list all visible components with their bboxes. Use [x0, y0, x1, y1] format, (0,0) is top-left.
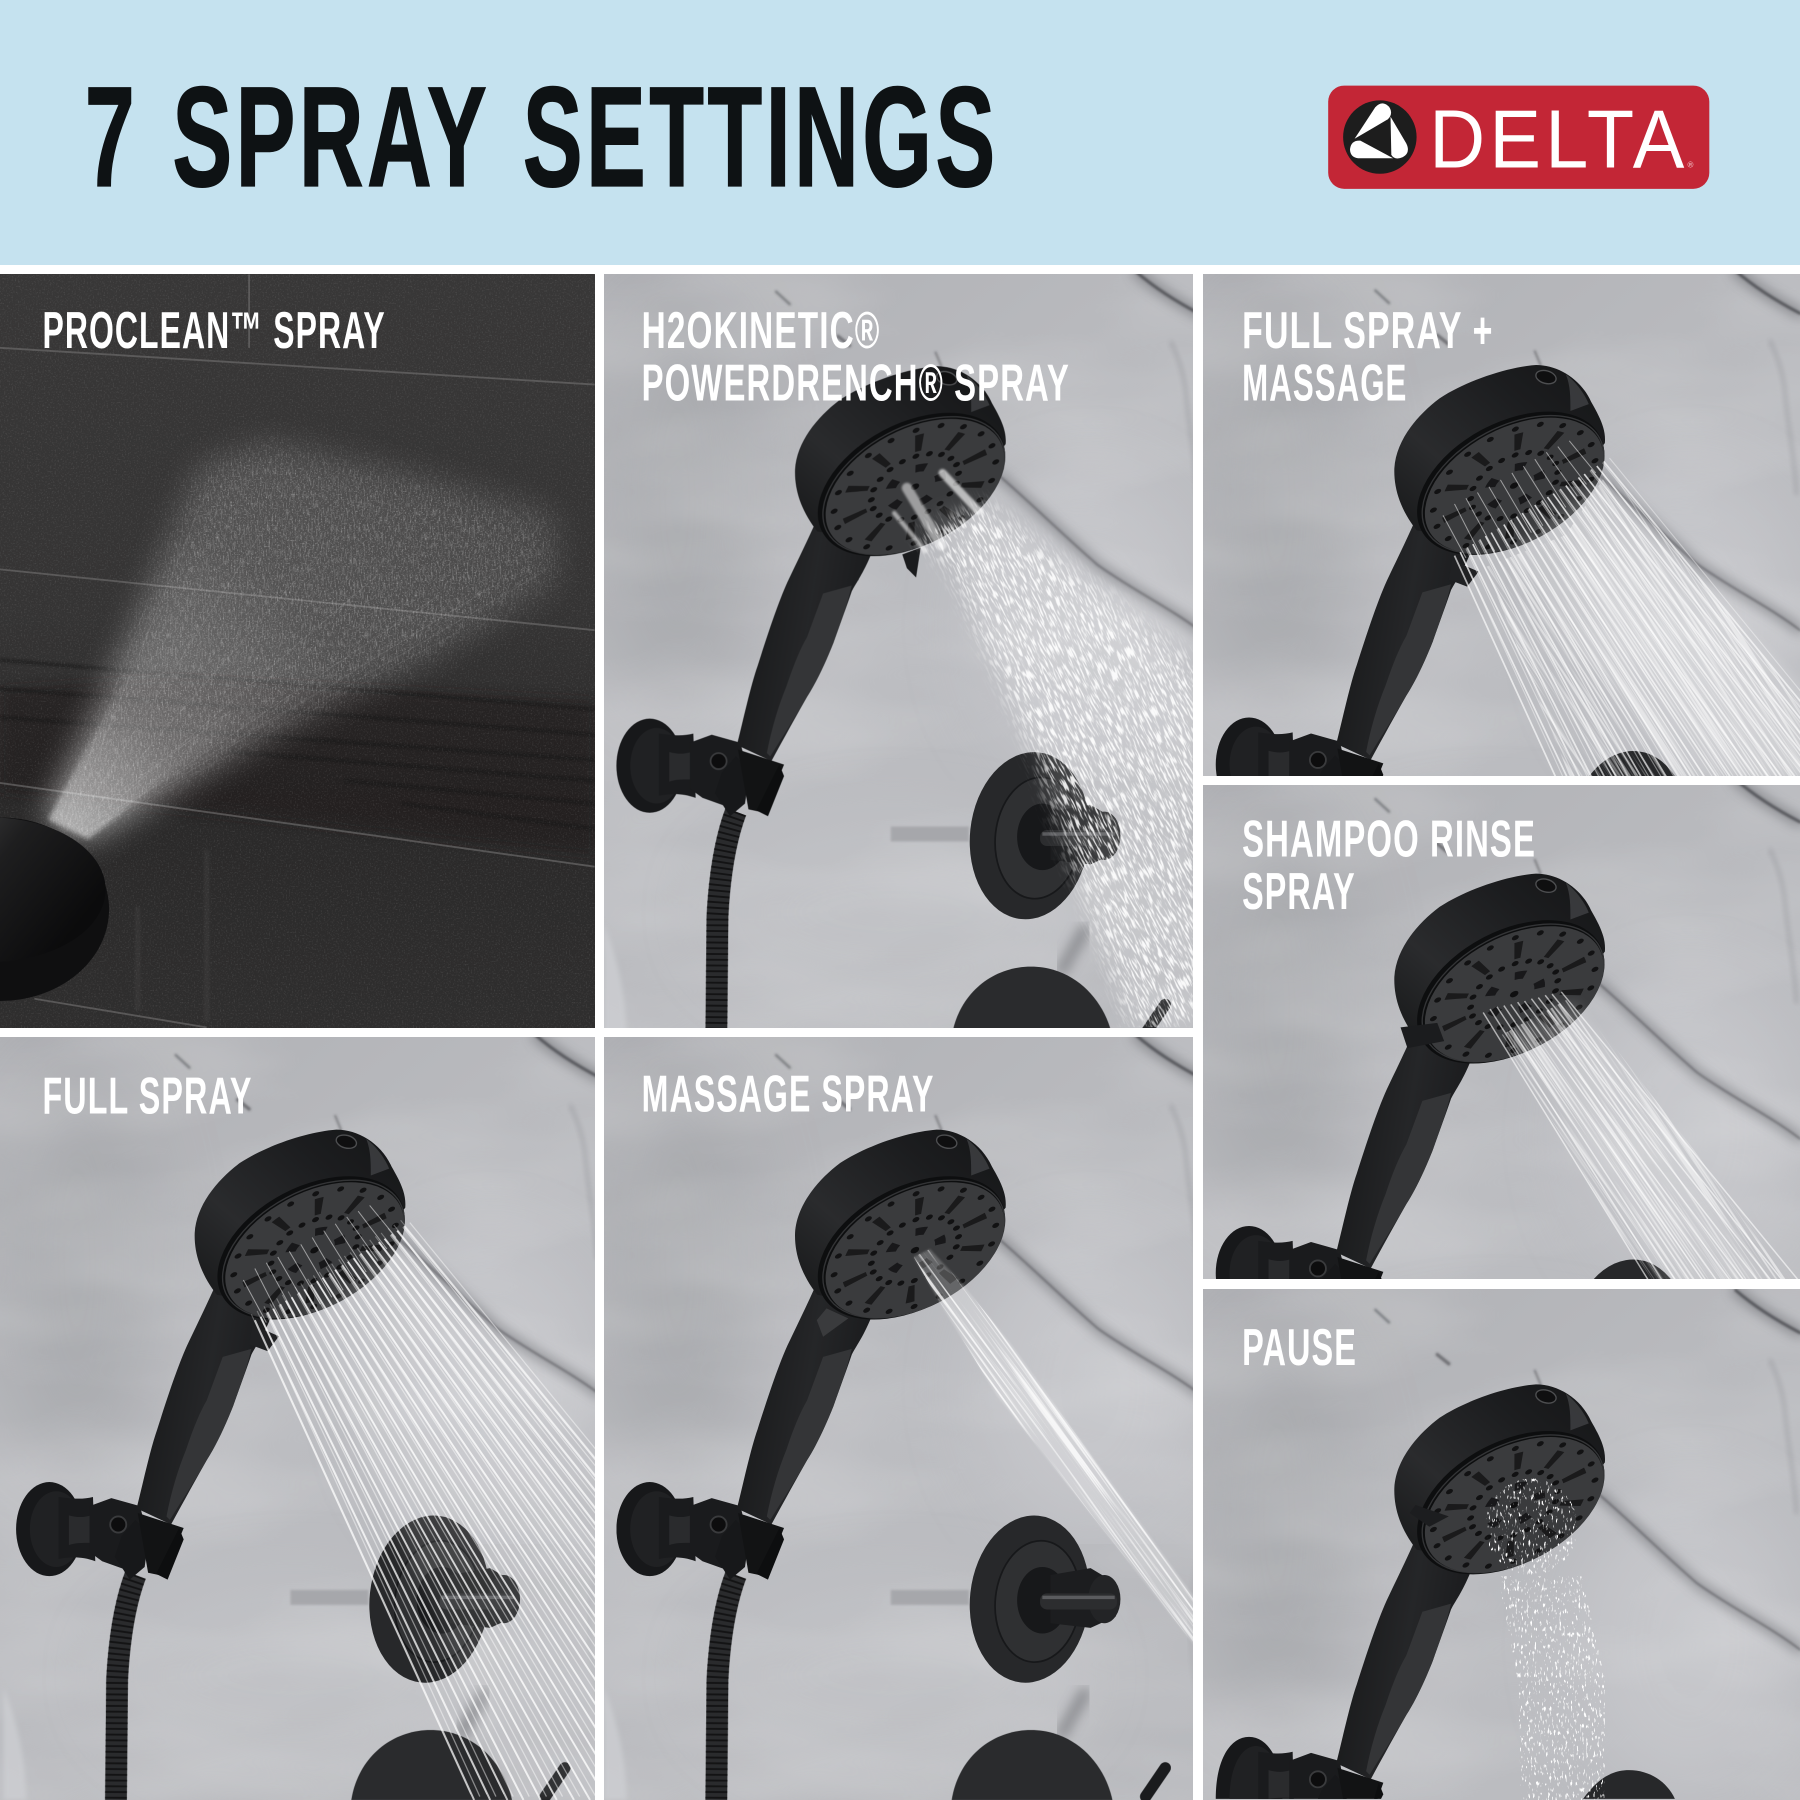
label: PAUSE [1242, 1318, 1357, 1376]
labels: SHAMPOO RINSE [1242, 809, 1536, 867]
labels [642, 301, 1070, 412]
panel: Massage spray [18, 1037, 1193, 1800]
panel: Pause [1203, 874, 1800, 1800]
label: MASSAGE SPRAY [642, 1064, 934, 1122]
water: full cone [1442, 440, 1800, 776]
water: full cone [243, 1205, 595, 1800]
water mist spray [30, 428, 571, 856]
switch tab [817, 1308, 848, 1337]
label: PROCLEAN™ SPRAY [42, 301, 386, 359]
icon: Delta triangle mark [1343, 100, 1417, 174]
switch tab [249, 1325, 279, 1351]
switch tab [1410, 1505, 1449, 1527]
shower scene [0, 366, 1193, 1800]
logo wordmark: DELTA [1429, 93, 1689, 185]
shower head puck [0, 817, 109, 1001]
panel: H2OKinetic PowerDrench spray [604, 274, 1193, 1028]
panel: Full spray + massage [1203, 274, 1800, 1276]
water: single narrow jet [914, 1248, 1193, 1642]
labels [1242, 809, 1536, 920]
header band [0, 0, 1800, 265]
labels: H2OKINETIC® [642, 301, 880, 359]
labels: MASSAGE [1242, 354, 1407, 412]
title: 7 SPRAY SETTINGS [85, 58, 999, 217]
shower scene [1203, 785, 1800, 1279]
switch tab [902, 548, 921, 577]
shower scene [604, 1037, 1193, 1800]
label: FULL SPRAY [42, 1067, 253, 1125]
shower scene [1203, 274, 1800, 1276]
water: wide droplet cone [890, 468, 1193, 1028]
shower scene [604, 274, 1193, 1028]
dark tile wall [0, 273, 595, 1029]
water: sparse droplets [1486, 1478, 1605, 1800]
panel: ProClean spray [0, 274, 595, 1028]
registered mark: ® [1688, 160, 1694, 169]
logo: Delta [1328, 86, 1709, 189]
water: narrow cone [1482, 992, 1798, 1279]
switch tab [1401, 1023, 1444, 1048]
shower scene [1203, 1289, 1800, 1800]
switch tab [1449, 560, 1479, 587]
labels [1242, 301, 1494, 412]
panel: Shampoo rinse spray [1203, 365, 1800, 1279]
panel: Full spray [0, 366, 1193, 1800]
labels: SPRAY [1242, 862, 1356, 920]
labels: FULL SPRAY + [1242, 301, 1494, 359]
